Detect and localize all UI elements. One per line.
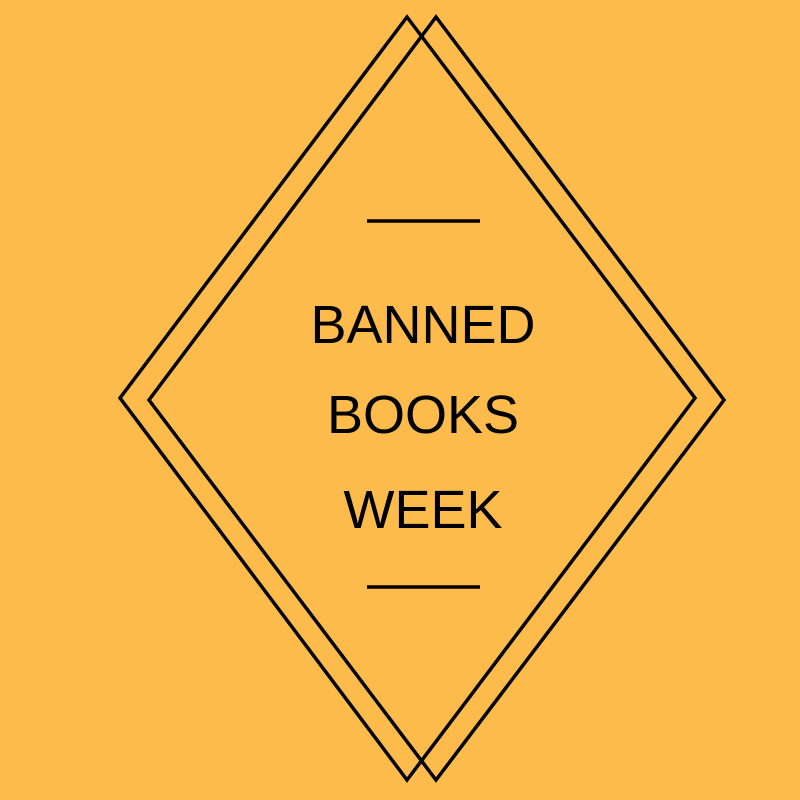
left diamond outline [120, 17, 695, 780]
title: BANNED [310, 295, 536, 355]
bottom bar [367, 585, 480, 589]
right diamond outline [149, 17, 724, 780]
title: WEEK [343, 480, 503, 540]
title: BOOKS [327, 385, 519, 445]
top bar [367, 219, 480, 223]
title [310, 295, 536, 540]
